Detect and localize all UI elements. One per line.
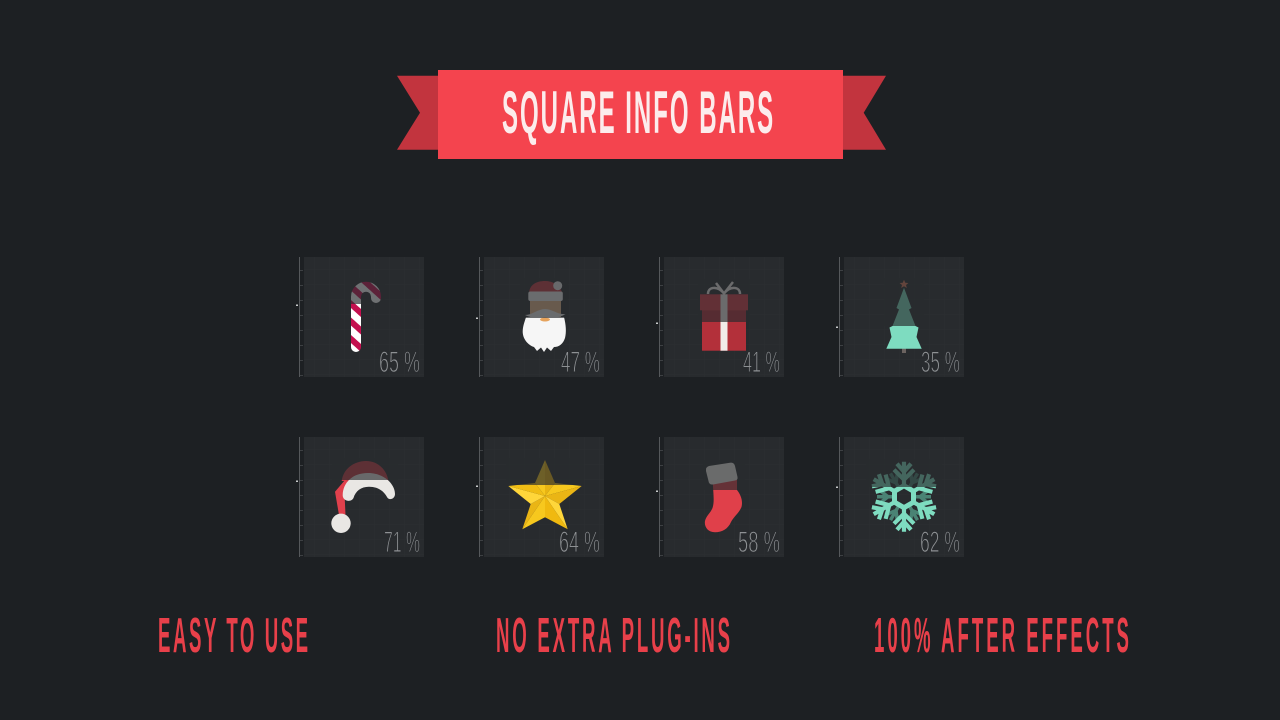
banner left ribbon tail [397,76,438,150]
panel: snowflake 62% [836,437,964,559]
banner body [438,70,843,159]
icon: santa hat [331,458,398,533]
panel: stocking 58% [656,437,784,559]
title: SQUARE INFO BARS [502,79,773,146]
banner right ribbon tail [843,76,886,150]
icon: stocking [703,460,745,532]
percent label: 65 % [379,346,420,379]
panel: star 64% [476,437,604,559]
icon: star [506,458,584,529]
caption: easy to use: EASY TO USE [158,607,308,663]
icon: snowflake [866,459,942,532]
percent label: 64 % [559,526,600,559]
panel: candy cane 65% [296,257,424,379]
percent label: 71 % [384,526,420,559]
icon: candy cane [356,287,376,347]
percent label: 35 % [921,346,960,379]
percent label: 58 % [738,526,780,559]
icon: gift [698,279,750,351]
caption: 100% after effects: 100% AFTER EFFECTS [874,607,1129,663]
panel: gift 41% [656,257,784,379]
panel: santa 47% [476,257,604,379]
caption: no extra plug-ins: NO EXTRA PLUG-INS [496,607,730,663]
panel: santa hat 71% [296,437,424,559]
percent label: 41 % [743,346,780,379]
icon: santa [520,278,568,352]
percent label: 47 % [561,346,600,379]
title banner [397,70,886,159]
percent label: 62 % [920,526,960,559]
panel: tree 35% [836,257,964,379]
icon: tree [884,278,924,353]
